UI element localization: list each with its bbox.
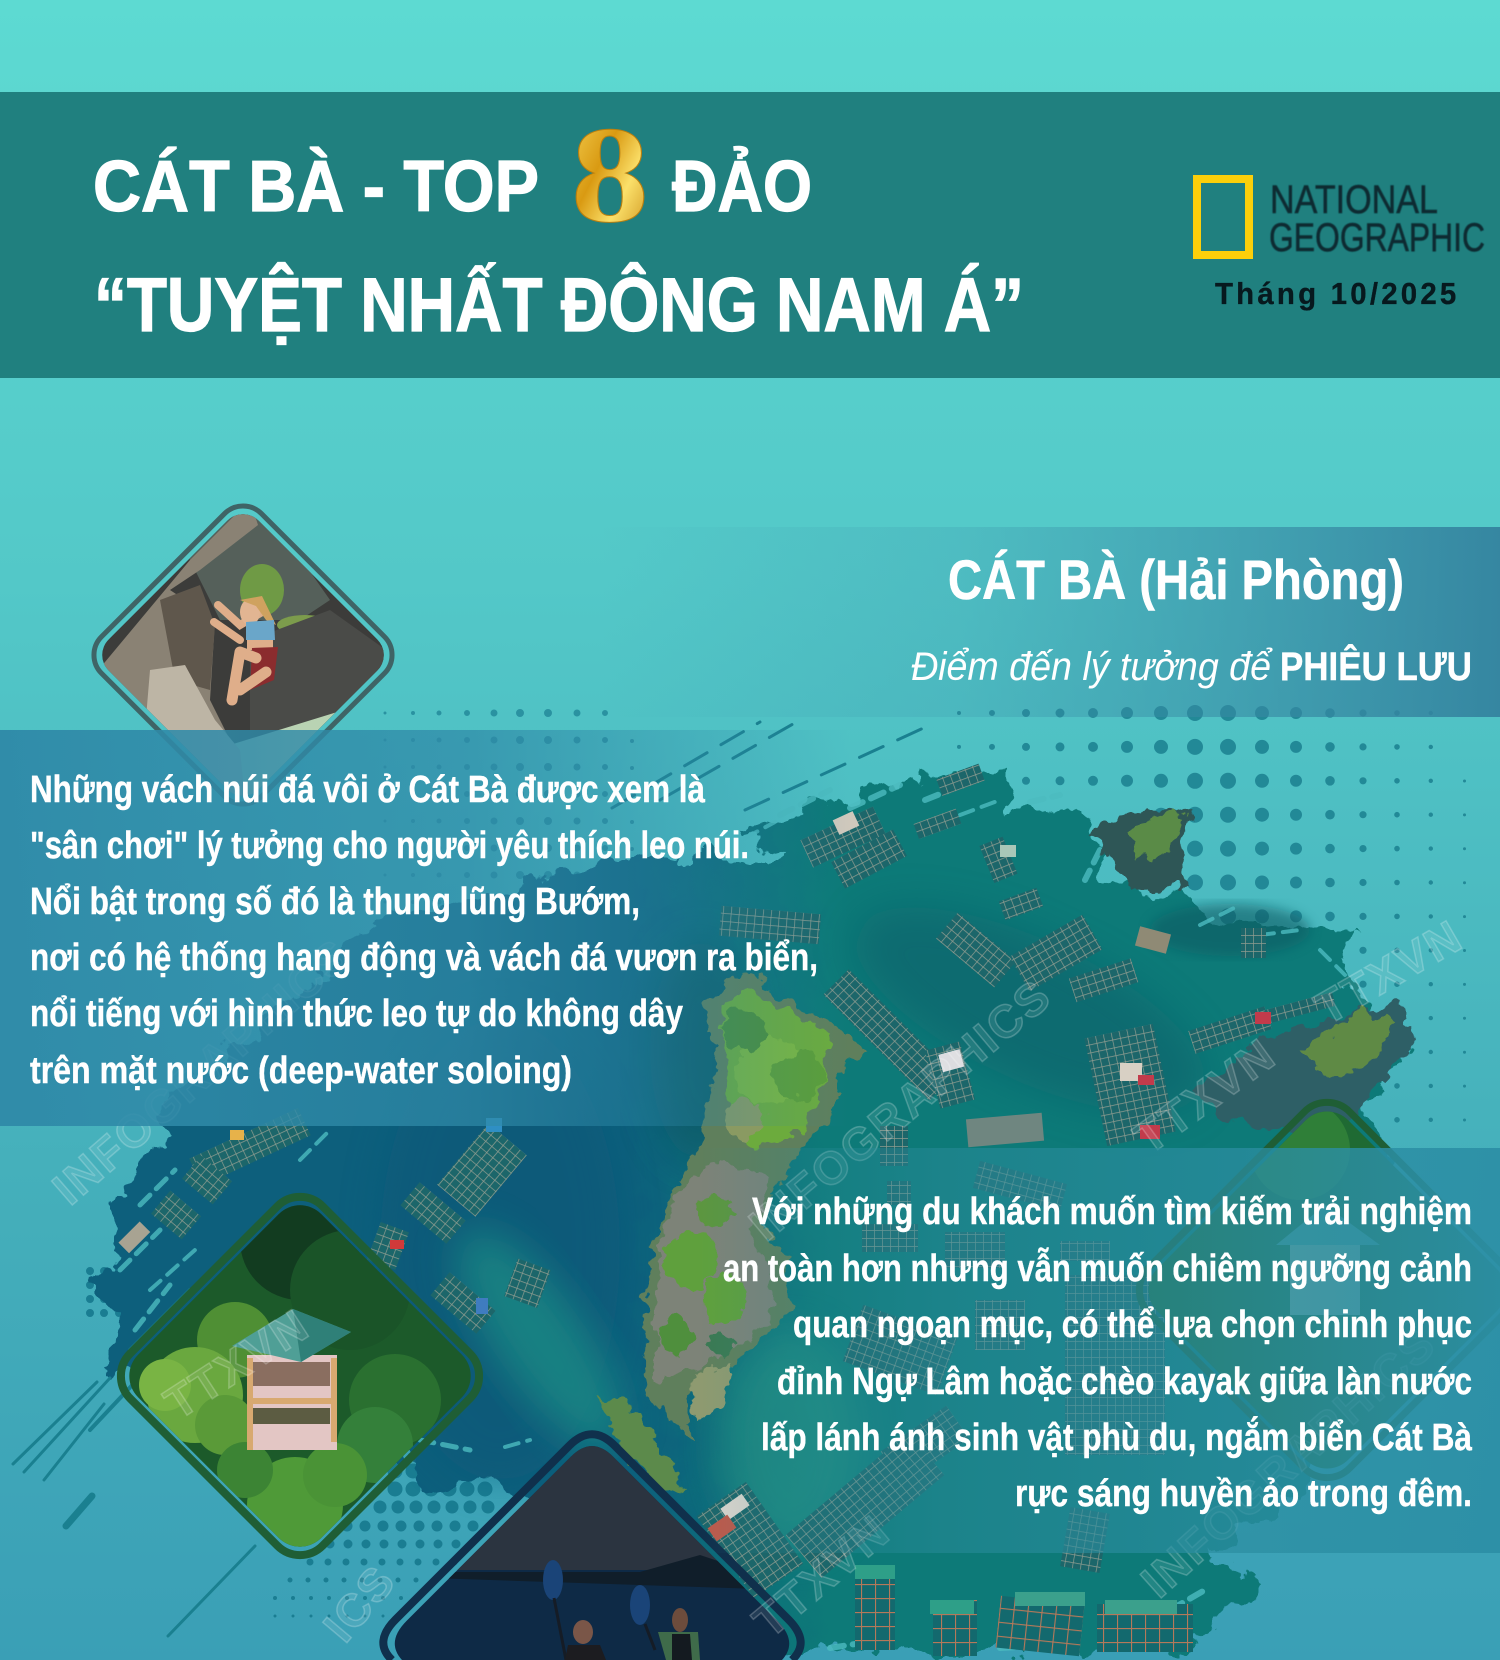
- photo content: [1148, 1112, 1500, 1468]
- heading block: Cát Bà: PHIÊU LƯU: [1280, 643, 1472, 689]
- gold number 8: 8: [571, 98, 649, 251]
- watermark: INFOGRAPHICS TTXVN: ICS: [313, 1555, 406, 1651]
- watermark: INFOGRAPHICS TTXVN: TTXVN: [1306, 909, 1471, 1035]
- photo ring: [1126, 1089, 1500, 1491]
- diamond photo: forest tower behind right text: [1126, 1089, 1500, 1491]
- paddlers: [543, 1560, 700, 1660]
- watermark: INFOGRAPHICS TTXVN: TTXVN: [743, 1504, 900, 1648]
- watermark: INFOGRAPHICS TTXVN: TTXVN: [155, 1298, 318, 1429]
- text block: climbing paragraph: nơi có hệ thống hang động và vách đá vươn ra biển,: [30, 937, 818, 979]
- heading block: Cát Bà: CÁT BÀ (Hải Phòng): [948, 548, 1404, 611]
- watermark: INFOGRAPHICS TTXVN: INFOGRAPHICS: [739, 969, 1061, 1251]
- lookout tower: [232, 1309, 351, 1450]
- title: [93, 98, 1024, 348]
- diamond photo: kayaking at night: [370, 1434, 810, 1660]
- title: CÁT BÀ - TOP: [93, 147, 539, 227]
- halftone dots: lower left: [90, 1271, 495, 1616]
- title: “TUYỆT NHẤT ĐÔNG NAM Á”: [94, 262, 1024, 348]
- photo ring: [383, 1434, 801, 1660]
- raft roofs: [230, 811, 1271, 1614]
- climber: [214, 596, 278, 700]
- splash marks along the photo edge: [120, 780, 1345, 1648]
- photo content: [129, 1205, 471, 1547]
- floating fish farm rafts: [118, 764, 1336, 1656]
- panel: right heading band: [600, 527, 1500, 717]
- date: Tháng 10/2025: [1215, 277, 1456, 311]
- watermark: INFOGRAPHICS TTXVN: [42, 909, 1471, 1651]
- text block: Ngự Lâm and kayak paragraph: [723, 1191, 1473, 1515]
- photo content: [102, 514, 384, 796]
- streaks: [13, 720, 930, 1636]
- heading block: Cát Bà: [911, 548, 1472, 689]
- small karst island upper right: [1088, 805, 1190, 890]
- heading block: Cát Bà: Điểm đến lý tưởng để: [911, 645, 1273, 689]
- diamond photo: climber on limestone cliff: [92, 504, 394, 806]
- photo ring: [108, 1184, 492, 1568]
- central limestone island: [597, 970, 867, 1493]
- halftone dots: upper right: [959, 713, 1464, 1125]
- sea shape: [87, 770, 1409, 1650]
- text block: climbing paragraph: trên mặt nước (deep-water soloing): [30, 1050, 572, 1092]
- rocky island lower right: [1195, 1000, 1414, 1130]
- photo content: [394, 1446, 790, 1660]
- watermark: INFOGRAPHICS TTXVN: TTXVN: [1124, 1028, 1285, 1164]
- National Geographic logo: NATIONAL: [1270, 178, 1438, 222]
- diamond photo: forest lookout tower: [108, 1180, 492, 1568]
- halftone dots: behind left text: [385, 713, 632, 945]
- watermark: INFOGRAPHICS TTXVN: INFOGRAPHICS: [1131, 1317, 1446, 1607]
- panel: right text band: [700, 1148, 1500, 1553]
- text block: climbing paragraph: Những vách núi đá vôi ở Cát Bà được xem là: [30, 769, 706, 811]
- aerial photo: sea with floating fish farms and islands: [13, 720, 1414, 1656]
- text block: climbing paragraph: "sân chơi" lý tưởng cho người yêu thích leo núi.: [30, 825, 749, 867]
- photo ring: [83, 495, 403, 815]
- title: ĐẢO: [672, 146, 812, 227]
- National Geographic logo: [1197, 178, 1485, 260]
- sea shading: [380, 866, 1310, 1550]
- watermark: INFOGRAPHICS TTXVN: INFOGRAPHICS: [42, 928, 361, 1215]
- header banner: [0, 92, 1500, 378]
- text block: climbing paragraph: nổi tiếng với hình thức leo tự do không dây: [30, 993, 683, 1035]
- text block: climbing paragraph: [30, 769, 818, 1092]
- text block: climbing paragraph: Nổi bật trong số đó là thung lũng Bướm,: [30, 881, 640, 923]
- panel: left text band: [0, 730, 850, 1126]
